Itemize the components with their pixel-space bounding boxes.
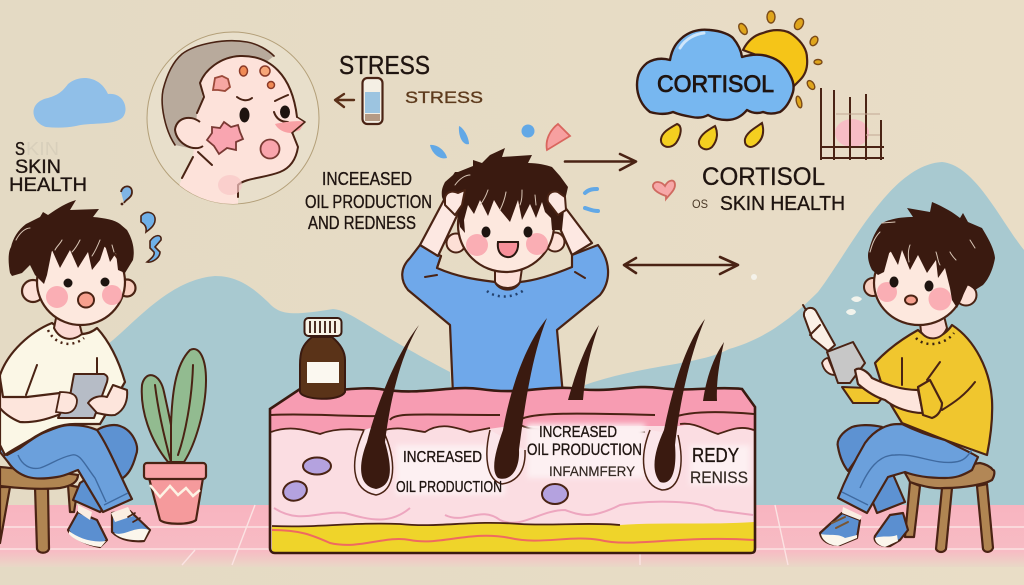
stool seat (905, 463, 994, 488)
chart: small bars (821, 88, 884, 160)
back leg (868, 472, 905, 513)
dot (751, 274, 757, 280)
shirt (875, 325, 992, 455)
bubbles (846, 296, 862, 315)
stool legs (905, 482, 920, 537)
arm (855, 369, 923, 413)
icon: cortisol cloud: CORTISOL (657, 71, 774, 98)
text: increased oil production and redness (305, 169, 432, 233)
icon: magnified face with skin problems (147, 32, 319, 210)
shoes (68, 512, 107, 547)
text: os skin health: OS (692, 197, 708, 211)
character: left child (0, 200, 150, 553)
dermis body (270, 387, 755, 553)
forearms (420, 198, 462, 256)
pink dermis lines (274, 502, 753, 523)
hands (445, 190, 465, 215)
tee shirt (0, 323, 125, 455)
collar dots (916, 333, 954, 344)
tablet (827, 342, 865, 383)
neck (495, 268, 522, 288)
arrow: double headed (624, 257, 738, 274)
neck (920, 316, 947, 338)
panel: skin cross-section: OIL PRODUCTION (396, 479, 502, 496)
label: skin health: SKIN (15, 157, 61, 178)
hair (868, 202, 995, 308)
panel: skin cross-section: INFANMFERY (549, 463, 636, 479)
ears (22, 280, 44, 302)
icon: brown bottle (300, 318, 345, 399)
shirt with sleeves (402, 245, 608, 395)
follicle labels: INCREASED (403, 449, 482, 466)
arrow: right to cortisol (565, 154, 636, 170)
floor (0, 505, 1024, 567)
stool seat (0, 467, 78, 489)
ears (864, 278, 882, 296)
label: skin health: S (15, 139, 25, 159)
icon: heart (653, 181, 675, 199)
shoes (820, 513, 860, 545)
panel: skin cross-section: RENISS (690, 468, 748, 487)
head (874, 241, 964, 325)
character: central child with hands on head (402, 148, 608, 395)
icon: ear (175, 118, 203, 148)
panel: skin cross-section: REDY (692, 445, 739, 467)
text: cortisol: CORTISOL (702, 163, 825, 191)
tablet (58, 374, 108, 418)
label: skin health: KIN (26, 139, 59, 159)
left hills (100, 276, 460, 510)
icon: question marks (121, 186, 161, 262)
icon: rash flower (207, 122, 243, 154)
hair (9, 200, 134, 284)
heading: stress: STRESS (339, 50, 430, 80)
jeans (0, 425, 132, 512)
neck (54, 318, 82, 339)
text halos (396, 424, 750, 495)
label: small stress: STRESS (405, 88, 483, 107)
text: os skin health: SKIN HEALTH (720, 193, 845, 215)
layer wavy lines (271, 412, 754, 420)
text: increased oil production and redness: INCEEASED (322, 169, 412, 189)
oil glands (303, 458, 331, 474)
icon: sweat drops and sparks (430, 124, 598, 211)
label: skin health (9, 139, 87, 196)
stool legs (0, 485, 78, 553)
top pink layer (271, 387, 755, 434)
icon: sun (737, 11, 822, 108)
text: increased oil production and redness: OIL PRODUCTION (305, 192, 432, 212)
arms (0, 378, 77, 422)
panel: skin cross-section: OIL PRODUCTION (527, 440, 642, 459)
text: increased oil production and redness: AND REDNESS (308, 213, 416, 233)
icon: cortisol cloud (637, 30, 794, 120)
icon: stress vial (362, 78, 382, 124)
tube (804, 308, 835, 351)
icon: yellow drops (661, 123, 763, 149)
icon: cactus plant (142, 349, 206, 524)
collar dots (48, 330, 84, 344)
label: skin health: HEALTH (9, 175, 87, 196)
panel: skin cross-section: INCREASED (539, 424, 617, 441)
arrow: stress left (335, 94, 354, 107)
hair (442, 148, 568, 233)
character: right child (803, 202, 995, 552)
pot (149, 478, 203, 524)
decorative blue cloud (34, 78, 126, 128)
jeans (838, 424, 978, 513)
head (37, 239, 125, 325)
panel: skin cross-section (270, 318, 755, 553)
outline (270, 387, 755, 553)
ears (446, 234, 466, 252)
right hills (585, 162, 1024, 510)
head (458, 178, 554, 272)
fat layer (272, 522, 754, 553)
lower sleeve (842, 387, 883, 403)
hair follicles (355, 425, 393, 495)
back leg (73, 470, 115, 512)
